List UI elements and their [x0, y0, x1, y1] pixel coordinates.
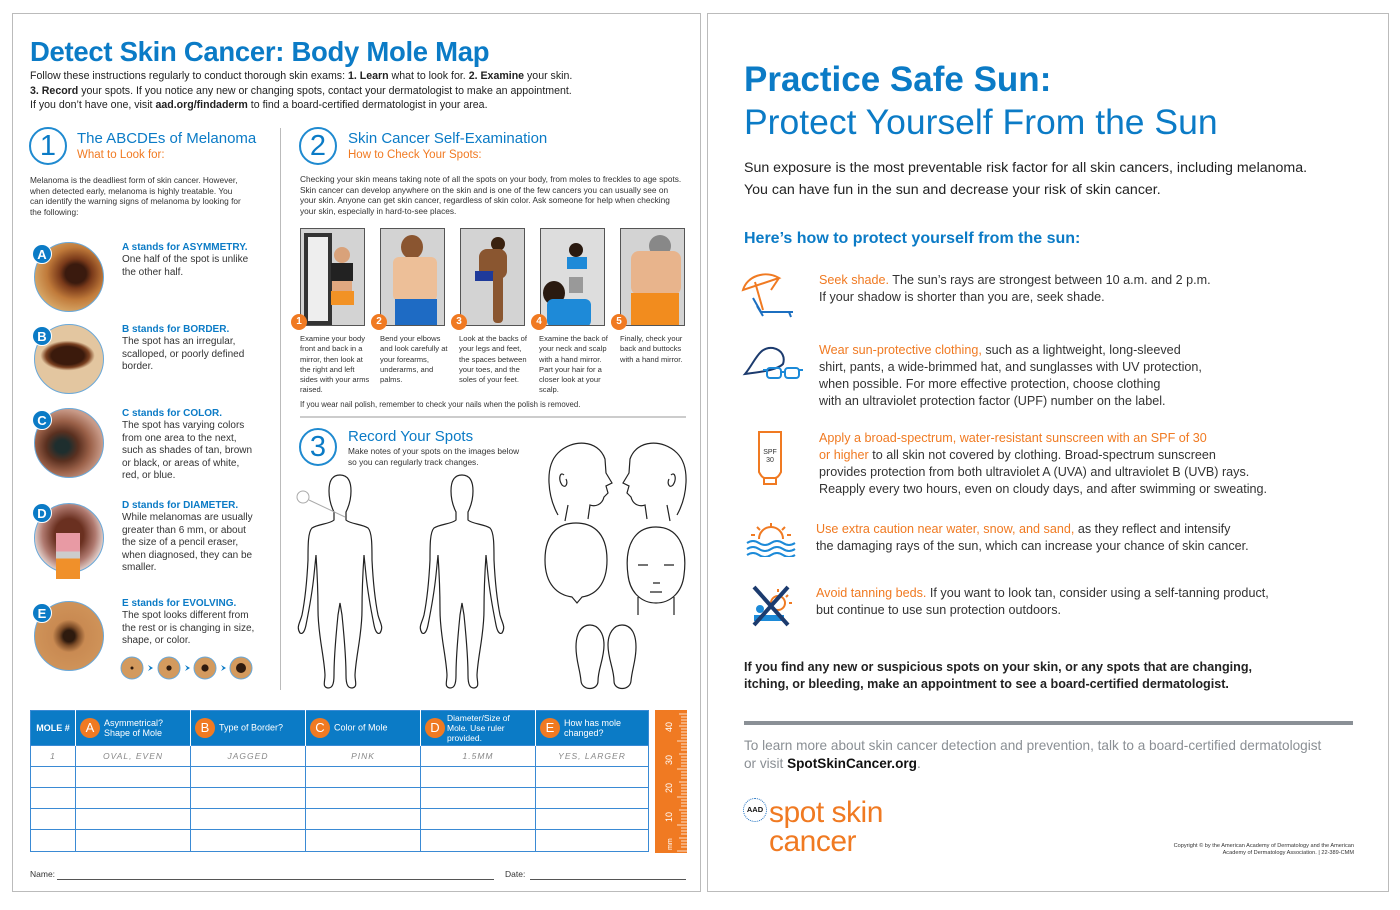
feet — [576, 625, 604, 688]
right intro paragraph: You can have fun in the sun and decrease your risk of skin cancer. — [744, 182, 1161, 198]
back body — [298, 475, 382, 688]
copyright: Academy of Dermatology Association. | 22-389-CMM — [1223, 850, 1354, 856]
logo: spot skin cancer: spot skin — [769, 796, 883, 829]
logo: spot skin cancer: AAD — [747, 805, 763, 814]
item E evolving: E — [38, 606, 46, 621]
item E evolving: The spot looks different from the rest or is changing in size, shape, or color. — [122, 610, 254, 646]
name and date lines: Date: — [505, 869, 525, 879]
photo 1 — [300, 228, 365, 326]
section 2 heading: How to Check Your Spots: — [348, 149, 482, 161]
copyright — [1174, 843, 1354, 856]
mole record table: Diameter/Size of — [447, 713, 510, 723]
section 1 heading: What to Look for: — [77, 149, 165, 161]
right title: Protect Yourself From the Sun — [744, 102, 1218, 142]
item: water snow sand: the damaging rays of the sun, which can increase your chance of skin cancer. — [816, 539, 1249, 553]
item C color: C stands for COLOR. — [122, 408, 222, 419]
logo: spot skin cancer: cancer — [769, 825, 856, 858]
item C color — [33, 408, 252, 481]
exam step photos: Finally, check your back and buttocks with a hand mirror. — [620, 334, 682, 364]
exam step photos: Examine the back of your neck and scalp with a hand mirror. Part your hair for a closer look at your scalp. — [539, 334, 608, 394]
panel: practice safe sun — [707, 13, 1389, 892]
head top — [545, 523, 607, 603]
mole record table: How has mole — [564, 718, 621, 728]
intro text: If you don’t have one, visit aad.org/findaderm to find a board-certified dermatologist in your area. — [30, 99, 488, 111]
mole record table: Mole. Use ruler — [447, 723, 505, 733]
item: seek shade — [819, 273, 1211, 304]
icon: number 3: 3 — [310, 431, 326, 463]
item: seek shade: If your shadow is shorter than you are, seek shade. — [819, 290, 1105, 304]
face front — [627, 527, 685, 615]
icon: sunscreen tube: 30 — [766, 457, 774, 464]
right title: Practice Safe Sun: — [744, 60, 1051, 99]
icon: number 2 — [299, 127, 337, 165]
text: learn more — [744, 738, 1322, 771]
item A asymmetry: A stands for ASYMMETRY. — [122, 242, 248, 253]
mole record table: YES, LARGER — [558, 751, 626, 761]
section 3 heading — [299, 428, 520, 467]
callout: see dermatologist: If you find any new or suspicious spots on your skin, or any spots that are changing, — [744, 660, 1252, 674]
front body — [420, 475, 504, 688]
section 2 heading — [299, 127, 547, 165]
mole record table: 1 — [50, 751, 56, 761]
icon: number 1: 1 — [40, 130, 56, 162]
item E evolving: E stands for EVOLVING. — [122, 598, 236, 609]
photo 5 — [620, 228, 685, 326]
step number badges — [291, 314, 307, 330]
photo 3 — [460, 228, 525, 326]
photo 2 — [380, 228, 445, 326]
icon: sun over water — [746, 523, 796, 557]
name and date lines — [30, 869, 686, 880]
mole record table: Asymmetrical? — [104, 718, 163, 728]
head left profile — [623, 443, 686, 521]
section 2 heading: Skin Cancer Self-Examination — [348, 130, 547, 147]
exam step photos: 2 — [376, 316, 382, 327]
item D diameter: D — [37, 506, 47, 521]
mole record table: C — [315, 720, 325, 735]
item: clothing — [819, 343, 1202, 408]
section 3 heading: Record Your Spots — [348, 428, 473, 445]
item: seek shade: Seek shade. The sun’s rays are strongest between 10 a.m. and 2 p.m. — [819, 273, 1211, 287]
mole record table: OVAL, EVEN — [103, 751, 163, 761]
icon: no tanning beds — [752, 586, 792, 626]
item: water snow sand — [816, 522, 1249, 553]
intro text: 3. Record your spots. If you notice any new or changing spots, contact your dermatologist to make an appointment. — [30, 85, 572, 97]
item: clothing: Wear sun-protective clothing, such as a lightweight, long-sleeved — [819, 343, 1181, 357]
right title — [744, 60, 1218, 142]
intro text: Follow these instructions regularly to conduct thorough skin exams: 1. Learn what to look for. 2. Examine your skin. — [30, 70, 572, 82]
ruler: 40 — [664, 722, 674, 732]
item: water snow sand: Use extra caution near water, snow, and sand, as they reflect and intensify — [816, 522, 1230, 536]
item: clothing: when possible. For more effective protection, choose clothing — [819, 377, 1160, 391]
exam step photos: Bend your elbows and look carefully at your forearms, underarms, and palms. — [380, 334, 448, 384]
item: tanning beds: Avoid tanning beds. If you want to look tan, consider using a self-tanning product, — [816, 586, 1269, 600]
exam step photos: 3 — [456, 316, 462, 327]
mole record table: Type of Border? — [219, 722, 283, 732]
exam step photos — [291, 228, 685, 394]
mole record table: 1.5MM — [462, 751, 493, 761]
mole record table: B — [201, 720, 209, 735]
sample mark — [297, 491, 345, 517]
item A asymmetry — [33, 242, 248, 312]
item: clothing: with an ultraviolet protection factor (UPF) number on the label. — [819, 394, 1166, 408]
item C color: C — [37, 413, 47, 428]
name and date lines: Name: — [30, 869, 55, 879]
section 1 heading: The ABCDEs of Melanoma — [77, 130, 256, 147]
item D diameter — [33, 500, 253, 579]
item C color: The spot has varying colors from one area to the next, such as shades of tan, brown or black, or areas of white, red, or blue. — [122, 420, 252, 481]
item: sunscreen: or higher to all skin not covered by clothing. Broad-spectrum sunscreen — [819, 448, 1216, 462]
ruler: 20 — [664, 783, 674, 793]
mole record table: JAGGED — [228, 751, 268, 761]
panel: body mole map — [12, 13, 701, 892]
photo 4 — [540, 228, 605, 326]
step captions: Examine your body front and back in a mirror, then look at the right and left sides with your arms raised. — [300, 334, 369, 394]
head right profile — [549, 443, 612, 521]
body outlines chart — [296, 442, 687, 690]
mole record table: provided. — [447, 733, 482, 743]
step number badges: 1 — [296, 316, 302, 327]
text: melanoma intro: Melanoma is the deadliest form of skin cancer. However, when detected early, melanoma is highly treatable. You can identify the warning signs of melanoma by looking for the following: — [30, 175, 241, 217]
ruler: 30 — [664, 755, 674, 765]
ruler: mm — [667, 838, 674, 850]
section 3 heading: Make notes of your spots on the images below — [348, 446, 519, 456]
exam step photos: 4 — [536, 316, 542, 327]
mole record table: Shape of Mole — [104, 728, 162, 738]
item: tanning beds — [816, 586, 1269, 617]
section 1 heading — [29, 127, 256, 165]
evolving sequence — [120, 656, 252, 680]
ruler — [655, 710, 687, 853]
ruler: 10 — [664, 812, 674, 822]
icon: umbrella chair — [742, 273, 793, 318]
item: sunscreen: Apply a broad-spectrum, water-resistant sunscreen with an SPF of 30 — [819, 431, 1207, 445]
mole record table: changed? — [564, 728, 604, 738]
icon: number 1 — [29, 127, 67, 165]
icon: number 3 — [299, 428, 337, 466]
icon: sunscreen tube — [758, 431, 782, 485]
copyright: Copyright © by the American Academy of Dermatology and the American — [1174, 843, 1354, 849]
callout: see dermatologist: itching, or bleeding, make an appointment to see a board-certified dermatologist. — [744, 677, 1229, 691]
item: sunscreen: Reapply every two hours, even on cloudy days, and after swimming or sweating. — [819, 482, 1267, 496]
intro text — [30, 70, 572, 111]
subheading: Here’s how to protect yourself from the sun: — [744, 230, 1080, 247]
item: sunscreen — [819, 431, 1267, 496]
item A asymmetry: One half of the spot is unlike the other half. — [122, 254, 248, 278]
section 3 heading: so you can regularly track changes. — [348, 457, 479, 467]
mole record table: E — [546, 720, 554, 735]
mole record table: Color of Mole — [334, 722, 388, 732]
exam step photos: 5 — [616, 316, 622, 327]
item D diameter: D stands for DIAMETER. — [122, 500, 238, 511]
mole record table: PINK — [351, 751, 375, 761]
item: tanning beds: but continue to use sun protection outdoors. — [816, 603, 1061, 617]
title: detect skin cancer: Detect Skin Cancer: Body Mole Map — [30, 36, 489, 67]
mole record table: MOLE # — [36, 723, 70, 733]
logo: spot skin cancer — [743, 796, 883, 858]
item B border: B — [37, 329, 47, 344]
icon: hat and sunglasses — [742, 346, 803, 379]
callout: see dermatologist — [744, 660, 1252, 691]
mole record table — [30, 710, 649, 852]
divider vertical — [280, 128, 281, 690]
icon: sunscreen tube: SPF — [763, 449, 777, 456]
item: clothing: shirt, pants, a wide-brimmed hat, and sunglasses with UV protection, — [819, 360, 1202, 374]
text: learn more: or visit SpotSkinCancer.org. — [744, 756, 921, 771]
item B border: The spot has an irregular, scalloped, or poorly defined border. — [122, 336, 244, 372]
item B border: B stands for BORDER. — [122, 324, 229, 335]
mole record table: D — [430, 720, 440, 735]
text: learn more: To learn more about skin cancer detection and prevention, talk to a board-certified dermatologist — [744, 738, 1321, 753]
text: nail polish: If you wear nail polish, remember to check your nails when the polish is removed. — [300, 400, 580, 409]
item E evolving — [33, 598, 254, 680]
item A asymmetry: A — [37, 247, 47, 262]
right intro paragraph — [744, 160, 1307, 198]
item D diameter: While melanomas are usually greater than 6 mm, or about the size of a pencil eraser, when diagnosed, they can be smaller. — [122, 512, 253, 573]
item: sunscreen: provides protection from both ultraviolet A (UVA) and ultraviolet B (UVB) rays. — [819, 465, 1249, 479]
mole record table: A — [86, 720, 94, 735]
exam step photos: Look at the backs of your legs and feet, the spaces between your toes, and the soles of your feet. — [459, 334, 527, 384]
right intro paragraph: Sun exposure is the most preventable risk factor for all skin cancers, including melanoma. — [744, 160, 1307, 176]
text: self exam intro: Checking your skin means taking note of all the spots on your body, from moles to freckles to age spots. Skin cancer can develop anywhere on the skin and is one of the few cancers you can usually see on your skin. Anyone can get skin cancer, regardless of skin color. Ask someone for help when checking your skin, especially in hard-to-see places. — [300, 174, 681, 216]
icon: number 2: 2 — [310, 130, 326, 162]
item B border — [33, 324, 244, 394]
